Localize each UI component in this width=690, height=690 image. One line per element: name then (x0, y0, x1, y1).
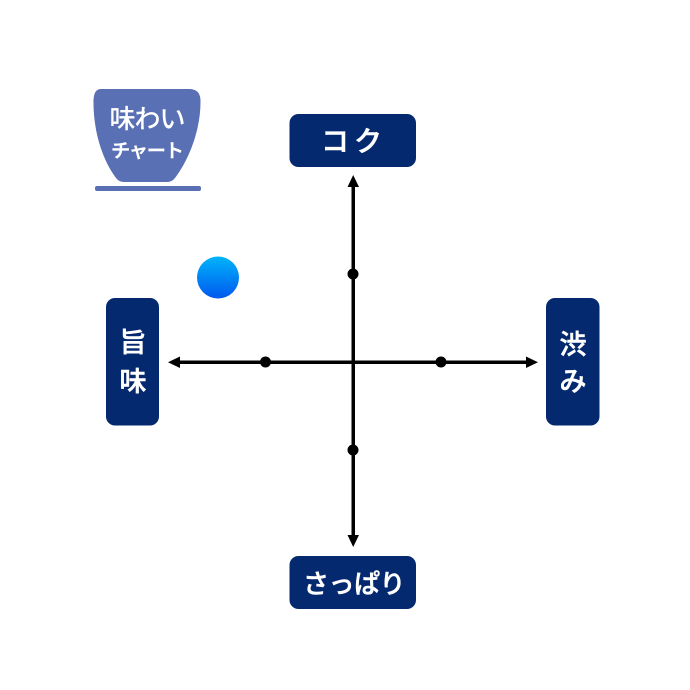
axis: horizontal arrow (168, 356, 538, 368)
label: left axis 旨味: 味 (120, 367, 146, 397)
label: top axis コク (290, 114, 416, 167)
label: right axis 渋み: 渋 (560, 330, 586, 360)
label: top axis コク: コク (321, 126, 387, 157)
bowl title text: 味わい (109, 104, 185, 134)
axis tick markers (260, 268, 446, 456)
label: right axis 渋み (546, 298, 600, 426)
label: left axis 旨味: 旨 (120, 328, 146, 358)
label: right axis 渋み: み (560, 367, 586, 397)
axis: vertical arrow (348, 175, 359, 547)
label: bottom axis さっぱり: さっぱり (303, 569, 405, 599)
bowl shape (93, 89, 201, 182)
label: left axis 旨味 (106, 298, 159, 426)
bowl base line (95, 186, 201, 191)
label: bottom axis さっぱり (290, 556, 416, 609)
taste position marker (197, 256, 239, 298)
icon: tasting chart bowl (93, 89, 201, 191)
bowl subtitle text: チャート (111, 141, 183, 162)
